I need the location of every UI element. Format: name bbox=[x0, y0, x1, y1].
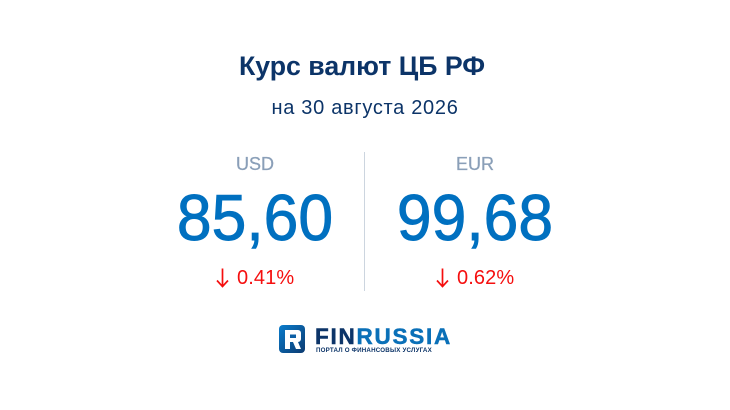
panel: USD bbox=[177, 154, 333, 289]
USD change: 0.41% bbox=[237, 267, 294, 289]
logo tagline: ПОРТАЛ О ФИНАНСОВЫХ УСЛУГАХ bbox=[316, 347, 432, 354]
USD label: USD bbox=[236, 154, 274, 174]
title: Курс валют ЦБ РФ bbox=[239, 51, 485, 81]
logo: Finrussia bbox=[279, 324, 452, 354]
EUR change: 0.62% bbox=[457, 267, 514, 289]
logo wordmark: FINRUSSIA bbox=[315, 324, 452, 349]
EUR rate: 99,68 bbox=[397, 181, 553, 254]
icon: R mark bbox=[279, 325, 305, 353]
icon: EUR down arrow bbox=[436, 268, 449, 288]
USD rate: 85,60 bbox=[177, 181, 333, 254]
EUR label: EUR bbox=[456, 154, 494, 174]
divider between currencies bbox=[364, 152, 365, 291]
panel: EUR bbox=[397, 154, 553, 289]
subtitle: date: на 30 августа 2026 bbox=[271, 97, 459, 119]
icon: USD down arrow bbox=[216, 268, 229, 288]
